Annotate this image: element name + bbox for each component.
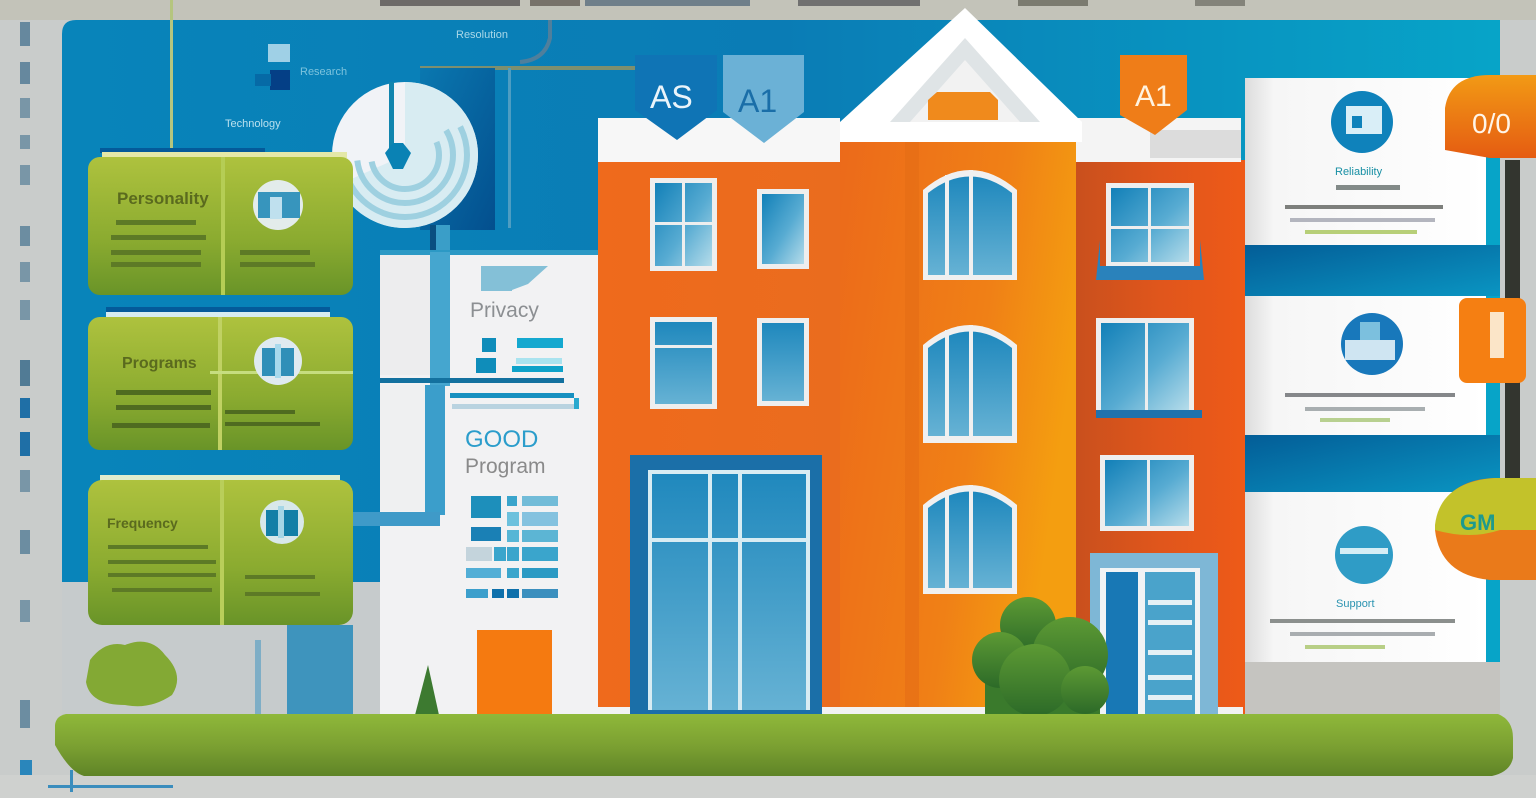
badge: shield middle: A1 [738,83,777,119]
arched window 3 [923,485,1017,594]
left dashed scale [20,22,32,798]
icon [254,337,302,385]
text lines [1285,185,1443,234]
text lines [1270,619,1455,649]
panel: green card 3 [88,475,353,625]
pipe over panel [352,252,450,526]
main door [630,455,822,715]
heading: Support [1336,598,1375,610]
bush in front of building [972,597,1109,716]
window L2 [757,189,809,269]
table [466,496,558,598]
badge: shield left: AS [650,79,693,115]
heading: Reliability [1335,166,1383,178]
grey zone lower right [1245,662,1500,715]
pole sketch [255,640,261,715]
badge: shield orange [1120,55,1187,135]
body text [112,390,320,428]
badge: shield middle [723,55,804,143]
icon [253,180,303,230]
icon: pin with label [225,44,347,130]
window R3 [1100,455,1194,531]
window R1 with balcony [1096,183,1204,280]
badge: shield orange: A1 [1135,80,1172,113]
vertical blue pipe [430,225,450,510]
base strip [598,707,1243,715]
heading: privacy: Privacy [470,299,539,322]
badge: green-orange circle: GM [1460,510,1495,535]
plant: small cypress [415,665,439,715]
body text [111,220,315,267]
dark square behind dial [420,68,495,230]
lower left grey zone [62,582,380,715]
top caption strip [0,0,1536,20]
connector lines [170,0,635,228]
right side dark strip [1505,160,1520,480]
right wing [1076,160,1245,715]
window L3 [650,317,717,409]
plant: left shrub [86,642,177,706]
icon [1335,526,1393,584]
center tower [840,140,1076,715]
roof: left band [598,118,840,162]
gap bands [1245,245,1500,296]
heading: program: Program [465,455,546,478]
badge: orange tile 1 [1445,75,1536,158]
panel: right card 2 [1245,296,1486,435]
heading: Programs [122,355,197,372]
icon: pin with label: Technology [225,118,281,130]
side door [1090,553,1218,715]
icon [260,500,304,544]
badge: orange tile 1: 0/0 [1472,108,1511,139]
arched window 1 [923,170,1017,280]
heading: Frequency [107,515,178,531]
icon: person and lines [476,338,563,373]
badge: orange tile 2 [1459,298,1526,383]
roof: gable [840,8,1082,142]
bottom left corner marks [48,770,173,792]
roof: right band [1076,118,1241,162]
heading: Personality [117,189,209,208]
icon: pin with label: Research [300,66,347,78]
heading: good: GOOD [465,426,538,453]
arched window 2 [923,325,1017,443]
text lines [1285,393,1455,422]
blue block behind lower-left [287,625,353,715]
window R2 [1096,318,1202,418]
building [598,8,1245,715]
icon [1341,313,1403,375]
panel: right card 3 [1245,492,1486,662]
panel: green card 2 [88,307,353,450]
badge: green-orange circle [1435,478,1536,580]
roof ornament [928,92,998,120]
panel: right card 1 [1245,78,1486,245]
label: top right of blue panel: Resolution [456,29,508,41]
badge: shield left [635,55,717,140]
window L1 [650,178,717,271]
left wing [598,160,843,715]
panel: green card 1 [88,148,353,295]
window L4 [757,318,809,406]
roof shadow [1150,130,1241,158]
icon [1331,91,1393,153]
divider lines [380,378,579,409]
icon: flag [481,266,548,291]
chart: circular dial [332,82,478,228]
orange block [477,630,552,715]
body text [108,545,320,596]
ground bar [0,714,1536,798]
panel: central white info column [352,250,598,715]
